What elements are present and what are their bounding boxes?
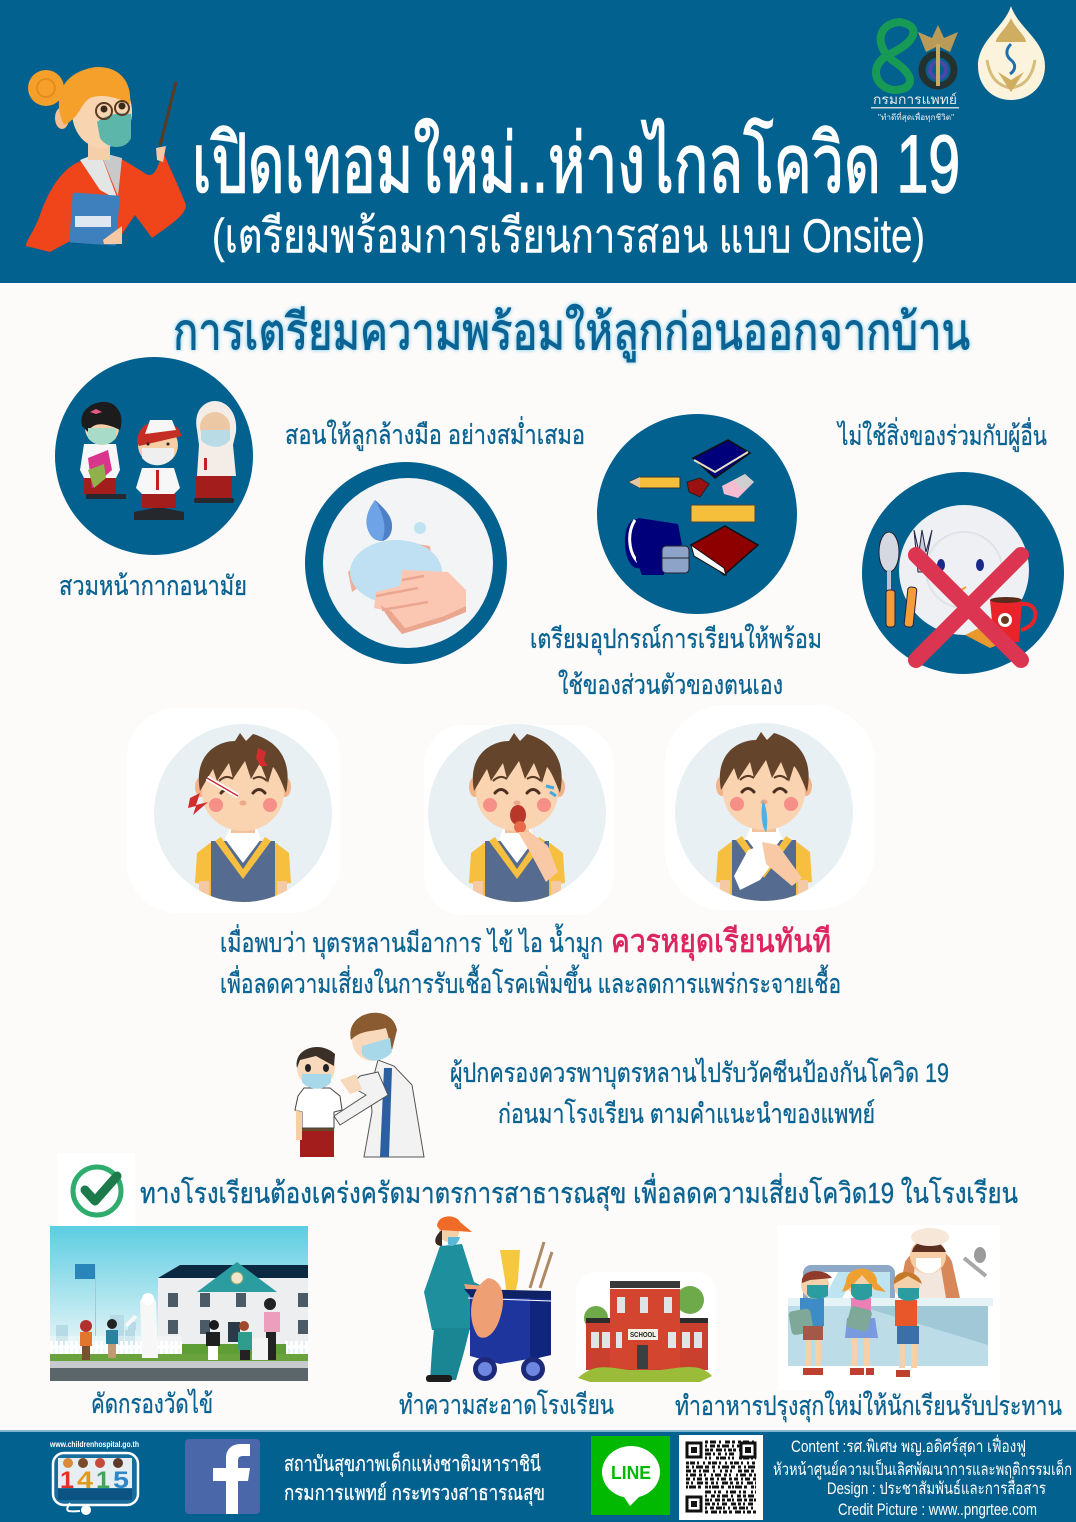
panel: fever symptom — [127, 708, 340, 913]
illustration: school building — [576, 1272, 716, 1382]
illustration: janitor with cart — [424, 1216, 552, 1382]
icon: crossed out tableware — [862, 472, 1064, 674]
credit: content: Content :รศ.พิเศษ พญ.อดิศร์สุดา เฟื่องฟู — [791, 1434, 1026, 1457]
footer organization name: สถาบันสุขภาพเด็กแห่งชาติมหาราชินี — [284, 1450, 541, 1477]
white backdrop — [665, 705, 875, 910]
icon: facebook — [185, 1439, 260, 1514]
advice line: เมื่อพบว่า บุตรหลานมีอาการ ไข้ ไอ น้ำมูก — [220, 923, 603, 960]
logo: 80 years department of medical services: "ทำดีที่สุดเพื่อทุกชีวิต" — [878, 111, 954, 122]
illustration: school building: SCHOOL — [630, 1332, 657, 1339]
icon: three students in masks — [55, 357, 253, 555]
footer ministry name: กรมการแพทย์ กระทรวงสาธารณสุข — [284, 1481, 545, 1506]
label: clean the school: ทำความสะอาดโรงเรียน — [399, 1390, 614, 1420]
logo: 1415 hotline: 1 — [96, 1467, 110, 1494]
icon: line app — [591, 1436, 670, 1515]
logo: 1415 hotline: www.childrenhospital.go.th — [49, 1440, 139, 1449]
panel: runny nose symptom — [665, 705, 875, 910]
panel: cough symptom — [424, 724, 614, 915]
panel: prepare school supplies — [530, 414, 822, 700]
panel: vaccination — [295, 1013, 949, 1157]
icon: washing hands — [305, 462, 507, 664]
red call to action: ควรหยุดเรียนทันที — [611, 923, 831, 961]
logo: 80 years department of medical services — [871, 22, 959, 122]
illustration: school temperature screening — [50, 1226, 308, 1381]
teacher illustration — [26, 67, 186, 252]
white backdrop — [127, 708, 340, 913]
logo: 1415 hotline: 4 — [77, 1467, 94, 1494]
illustration: doctor vaccinating student — [295, 1013, 424, 1157]
logo: 80 years department of medical services: กรมการแพทย์ — [873, 92, 957, 107]
illustration: canteen with children and chef — [778, 1225, 1000, 1390]
symptom advice — [220, 923, 841, 999]
vaccination advice line 2: ก่อนมาโรงเรียน ตามคำแนะนำของแพทย์ — [498, 1098, 875, 1129]
panel: clean the school — [399, 1216, 716, 1420]
label: wear a mask: สวมหน้ากากอนามัย — [59, 571, 247, 601]
panel: do not share items — [836, 417, 1064, 674]
icon: green check mark — [58, 1153, 135, 1227]
vaccination advice: ผู้ปกครองควรพาบุตรหลานไปรับวัคซีนป้องกันโควิด 19 — [450, 1058, 949, 1090]
icon: boy with runny nose — [675, 723, 853, 904]
label: temperature screening: คัดกรองวัดไข้ — [91, 1389, 213, 1419]
footer band — [0, 1430, 1076, 1522]
header banner — [0, 0, 1076, 283]
logo: 1415 hotline: 1 — [60, 1467, 74, 1494]
panel: hand washing — [285, 416, 585, 664]
label: prepare school supplies: เตรียมอุปกรณ์การเรียนให้พร้อม — [530, 623, 822, 656]
icon: school supplies — [597, 414, 797, 614]
label: hand washing: สอนให้ลูกล้างมือ อย่างสม่ำเสมอ — [285, 416, 585, 451]
reason line: เพื่อลดความเสี่ยงในการรับเชื้อโรคเพิ่มขึ้น และลดการแพร่กระจายเชื้อ — [220, 964, 841, 999]
icon: boy with fever — [154, 724, 332, 905]
subtitle: (เตรียมพร้อมการเรียนการสอน แบบ Onsite) — [212, 209, 925, 262]
logo: royal water drop — [978, 6, 1045, 100]
icon: boy coughing — [428, 724, 606, 905]
logo: 1415 hotline: 5 — [113, 1467, 129, 1494]
panel: freshly cooked food — [675, 1225, 1062, 1423]
panel: temperature screening — [50, 1226, 308, 1419]
icon: line app: LINE — [611, 1463, 651, 1483]
label: use personal items: ใช้ของส่วนตัวของตนเอง — [558, 669, 783, 700]
school measures heading — [58, 1153, 1018, 1227]
white backdrop — [424, 725, 614, 915]
logo: 1415 hotline — [49, 1440, 139, 1515]
credits — [773, 1434, 1072, 1519]
QR code — [679, 1435, 763, 1520]
panel: wear a mask — [55, 357, 253, 601]
